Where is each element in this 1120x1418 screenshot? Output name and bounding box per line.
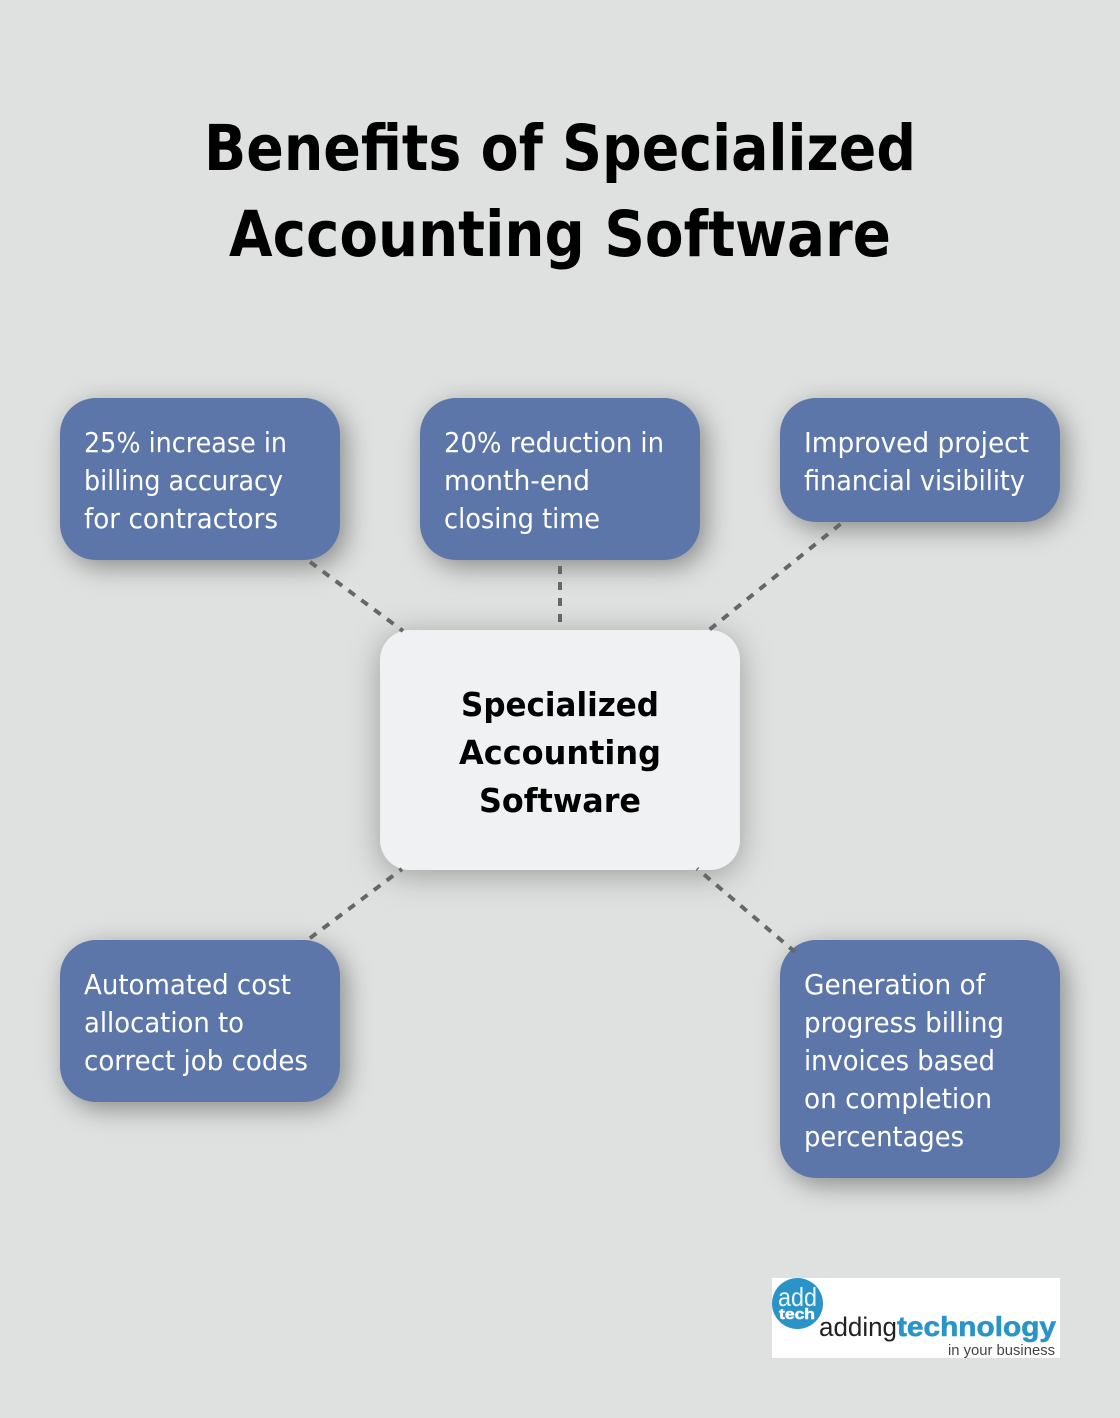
panel: month-end closing: closing time	[444, 503, 600, 535]
panel: central box: Specialized	[461, 685, 659, 724]
panel: central box: Software	[479, 781, 641, 820]
logo: tech	[779, 1306, 815, 1323]
title	[204, 112, 916, 271]
connector: bottom right	[697, 868, 795, 952]
panel: billing accuracy: billing accuracy	[84, 465, 283, 497]
panel: progress billing: invoices based	[804, 1045, 995, 1077]
logo	[772, 1278, 1060, 1359]
panel: billing accuracy: 25% increase in	[84, 427, 287, 459]
connector: top right	[709, 524, 840, 630]
panel: month-end closing: 20% reduction in	[444, 427, 664, 459]
panel: billing accuracy	[60, 398, 340, 560]
panel: progress billing: Generation of	[804, 969, 986, 1001]
title: Accounting Software	[229, 198, 891, 271]
panel: progress billing: percentages	[804, 1121, 964, 1153]
logo: in your business	[948, 1343, 1055, 1359]
title: Benefits of Specialized	[204, 112, 916, 185]
panel: month-end closing: month-end	[444, 465, 590, 497]
panel: cost allocation: Automated cost	[84, 969, 291, 1001]
panel: project visibility: financial visibility	[804, 465, 1025, 497]
panel: progress billing: progress billing	[804, 1007, 1004, 1039]
panel: central box: Accounting	[459, 733, 661, 772]
panel: progress billing	[780, 940, 1060, 1178]
panel: month-end closing	[420, 398, 700, 560]
panel: project visibility	[780, 398, 1060, 522]
connector: top left	[310, 562, 403, 631]
panel: cost allocation: correct job codes	[84, 1045, 308, 1077]
panel: cost allocation	[60, 940, 340, 1102]
logo: add	[778, 1282, 817, 1312]
panel: central box	[380, 630, 740, 870]
connector: top centre	[558, 566, 562, 630]
panel: billing accuracy: for contractors	[84, 503, 278, 535]
connector: bottom left	[310, 869, 402, 938]
logo: adding	[819, 1312, 897, 1342]
logo: technology	[897, 1311, 1056, 1342]
panel: project visibility: Improved project	[804, 427, 1029, 459]
panel: cost allocation: allocation to	[84, 1007, 244, 1039]
panel: progress billing: on completion	[804, 1083, 992, 1115]
